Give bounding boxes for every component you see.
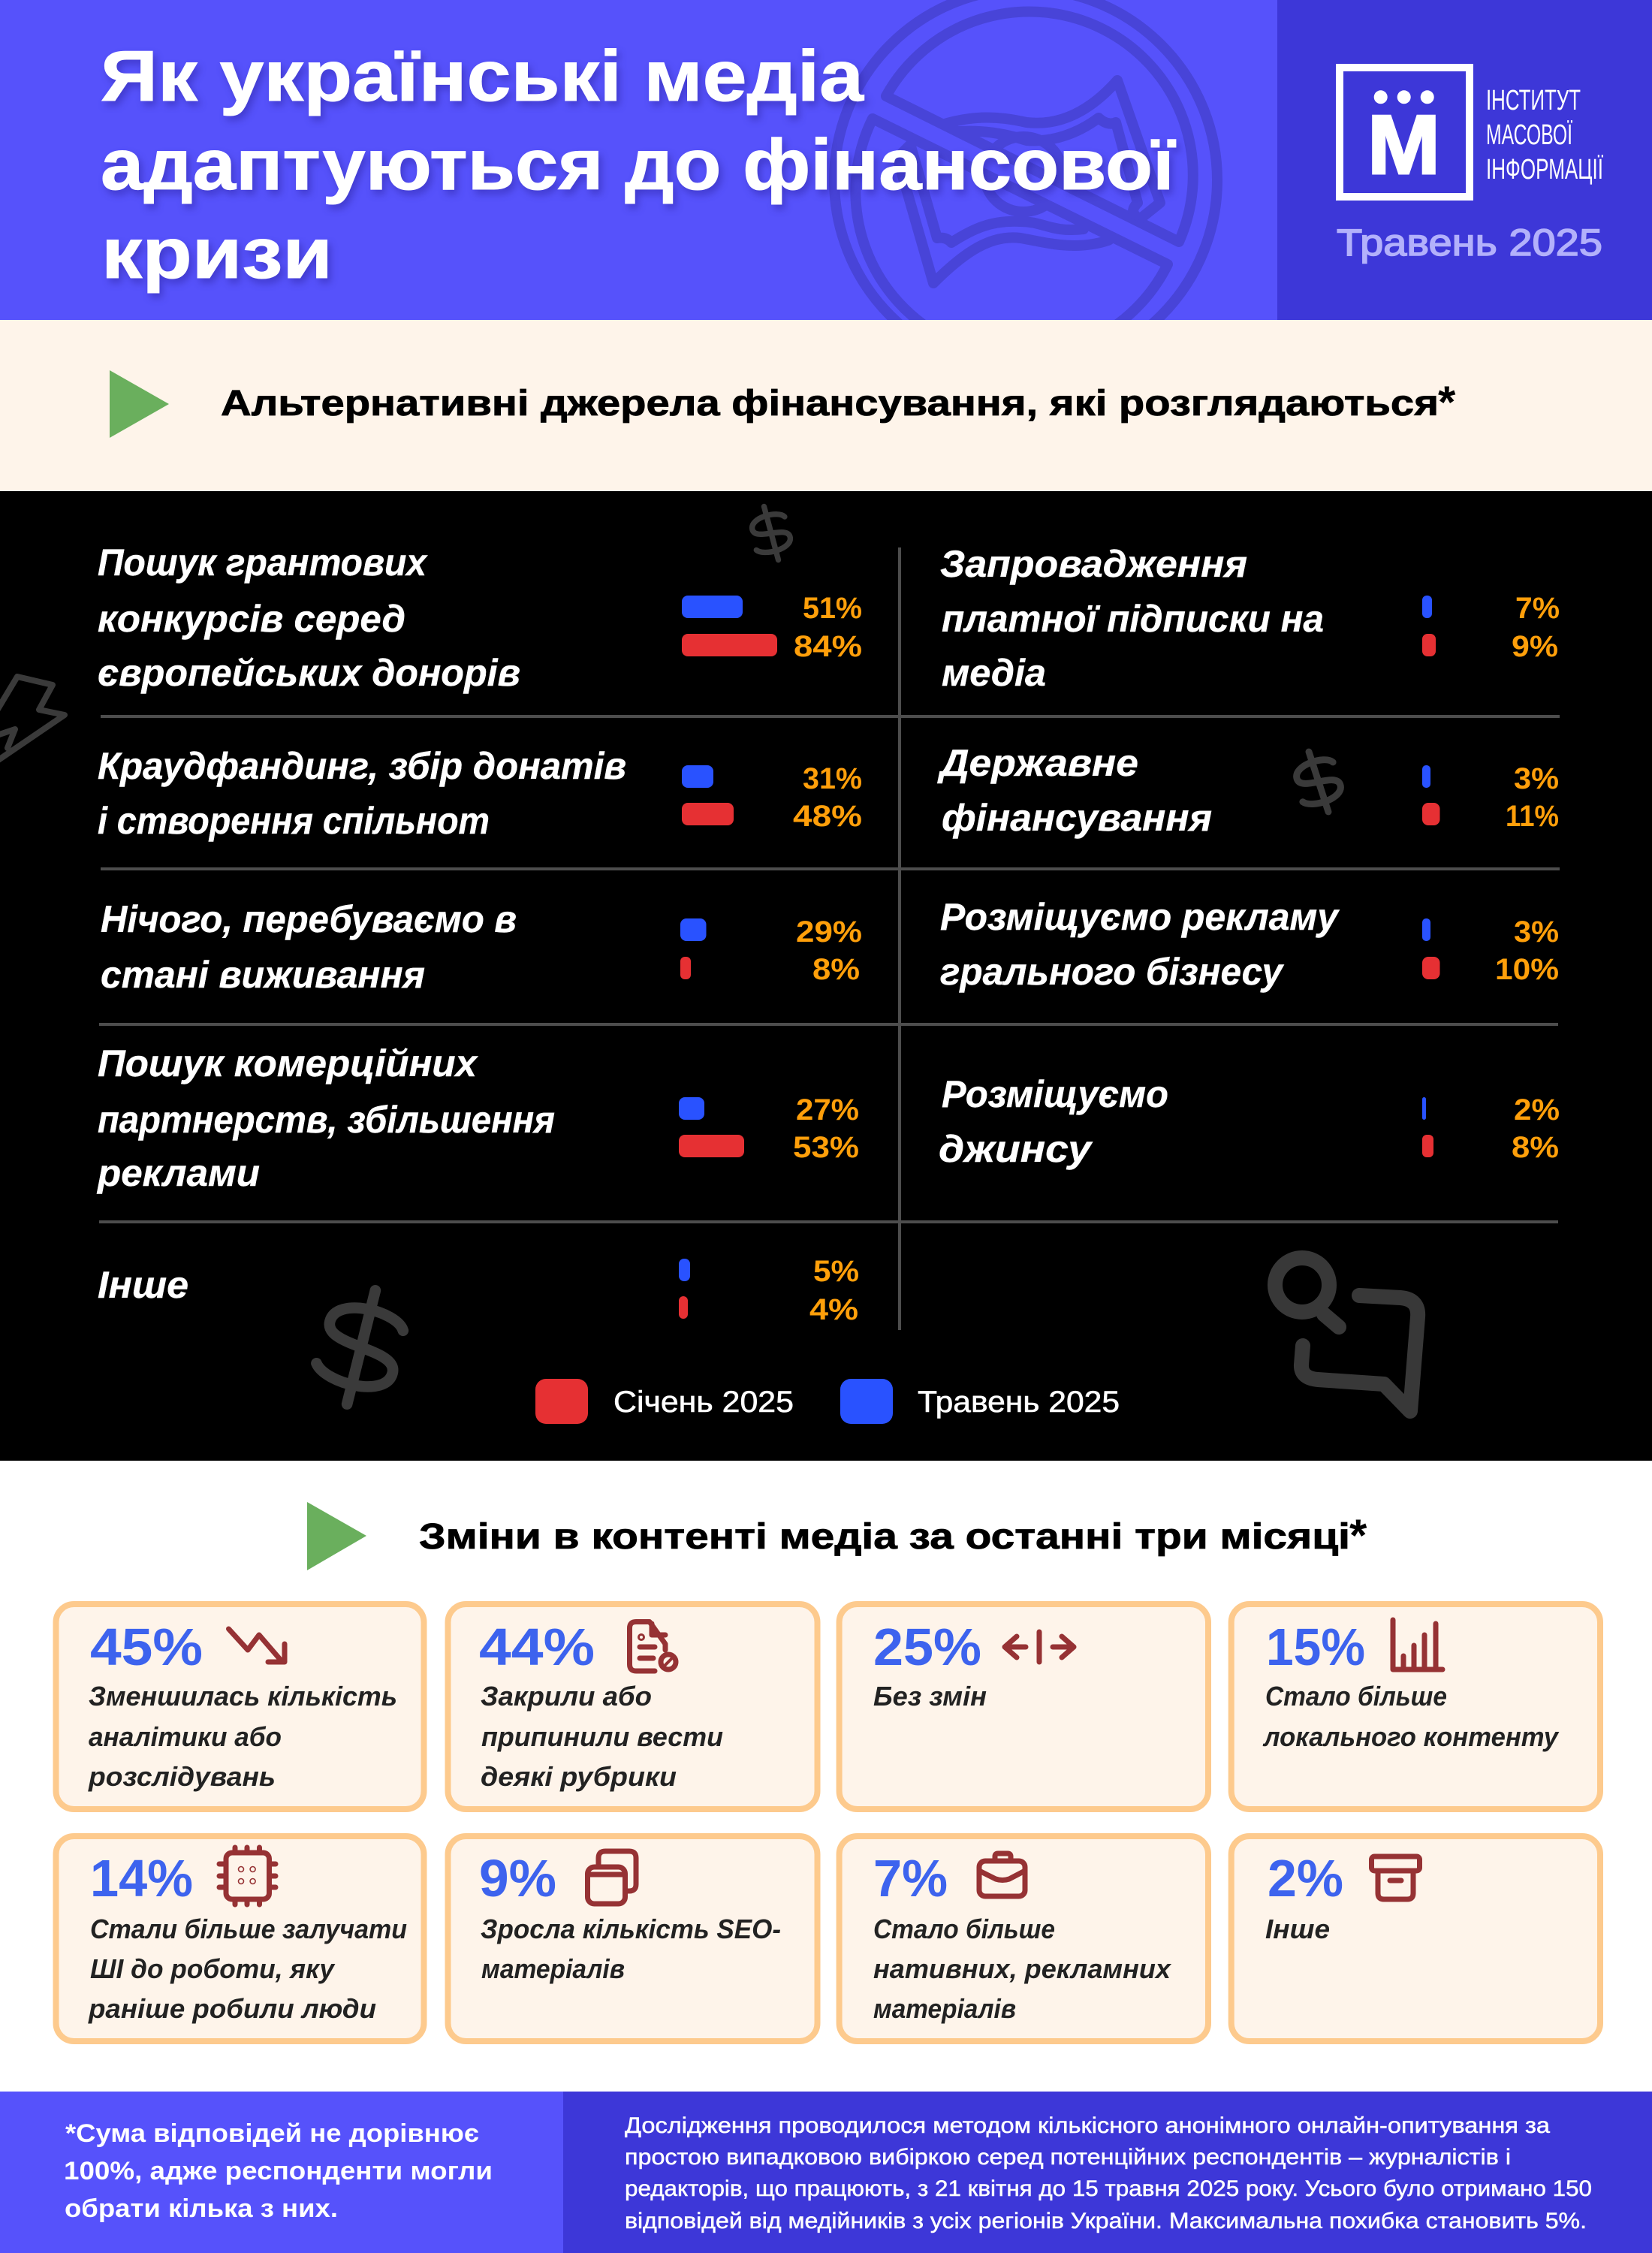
row: paid subscription: медіа (942, 652, 1046, 694)
card: 45% (56, 1604, 424, 1809)
row: paid placements (939, 1073, 1560, 1170)
icon: briefcase (979, 1853, 1025, 1896)
card: 45%: розслідувань (88, 1761, 276, 1792)
section heading: content changes (307, 1502, 1367, 1570)
row: grants: конкурсів серед (98, 598, 405, 640)
icon: chip (219, 1847, 276, 1905)
row: commercial partnerships: 27% (796, 1093, 859, 1126)
decorative icons (0, 502, 1418, 1413)
title: кризи (101, 213, 333, 294)
title: Як українські медіа (101, 36, 864, 116)
card: 9%: матеріалів (481, 1953, 625, 1984)
methodology: простою випадковою вибіркою серед потенційних респондентів – журналістів і (625, 2145, 1511, 2170)
row: grants (98, 541, 862, 694)
card: 14%: 14% (90, 1849, 193, 1908)
watermark: crossed-out banknote (829, 0, 1222, 320)
icon: layers (587, 1851, 636, 1904)
card: 14%: Стали більше залучати (90, 1914, 407, 1944)
card: 44%: 44% (479, 1618, 595, 1676)
row: grants: Пошук грантових (98, 541, 428, 584)
card: 45%: 45% (90, 1618, 203, 1676)
heading: funding sources (221, 377, 1456, 427)
row: other: 4% (809, 1293, 858, 1326)
card: 15% (1231, 1604, 1600, 1809)
row: crowdfunding: Краудфандинг, збір донатів (98, 745, 626, 787)
row: commercial partnerships: Пошук комерційних (98, 1042, 478, 1084)
grid lines (99, 547, 1560, 1330)
card: 44% (448, 1604, 817, 1809)
row: nothing: 8% (812, 953, 860, 986)
card: 45%: Зменшилась кількість (89, 1681, 397, 1712)
row: other: Інше (98, 1264, 188, 1306)
organisation name: ІНФОРМАЦІЇ (1486, 154, 1603, 185)
legend: Травень 2025 (918, 1386, 1120, 1419)
legend: Січень 2025 (613, 1386, 794, 1419)
row: grants: 84% (794, 630, 862, 663)
heading text: Зміни в контенті медіа за останні три місяці (419, 1517, 1350, 1557)
card: 7%: матеріалів (873, 1993, 1016, 2024)
card: 9% (448, 1836, 817, 2041)
organisation name: МАСОВОЇ (1486, 119, 1572, 151)
card: 7% (840, 1836, 1208, 2041)
row: nothing: 29% (796, 915, 862, 949)
row: state funding: 11% (1506, 800, 1559, 833)
card: 7%: нативних, рекламних (873, 1953, 1172, 1984)
icon: arrows apart (1005, 1632, 1074, 1662)
card: 7%: 7% (873, 1849, 948, 1908)
row: paid subscription: 9% (1512, 630, 1558, 663)
row: paid subscription: Запровадження (940, 543, 1247, 585)
logo mark: М (1367, 98, 1440, 192)
row: paid placements: джинсу (939, 1128, 1093, 1170)
heading text (419, 1510, 1367, 1561)
footnote (64, 2119, 493, 2223)
card: 2% (1231, 1836, 1600, 2041)
card: 25%: 25% (873, 1618, 981, 1676)
row: paid subscription: платної підписки на (942, 598, 1324, 640)
row: gambling ads: 10% (1495, 953, 1559, 986)
legend (535, 1379, 1120, 1424)
card: 14%: ШІ до роботи, яку (90, 1953, 336, 1984)
methodology: відповідей від медійників з усіх регіонів України. Максимальна похибка становить 5%. (625, 2209, 1587, 2233)
row: crowdfunding: і створення спільнот (98, 800, 490, 842)
row: nothing (101, 898, 862, 996)
card: 44%: деякі рубрики (481, 1761, 677, 1792)
header background (0, 0, 1277, 320)
row: commercial partnerships: партнерств, збільшення (98, 1099, 555, 1141)
heading text: * (1349, 1510, 1367, 1561)
row: nothing: стані виживання (101, 954, 425, 996)
row: paid placements: Розміщуємо (942, 1073, 1168, 1115)
row: grants: 51% (803, 592, 862, 625)
row: state funding: фінансування (942, 797, 1212, 839)
row: gambling ads (940, 896, 1559, 993)
icon: archive box (1371, 1856, 1419, 1899)
row: other: 5% (813, 1255, 859, 1288)
title (101, 36, 1176, 294)
icon: green triangle (110, 370, 169, 438)
date: Травень 2025 (1337, 222, 1602, 264)
icon: falling arrow (228, 1629, 285, 1662)
panel: funding sources chart (0, 491, 1652, 1461)
footnote: обрати кілька з них. (65, 2194, 338, 2223)
card: 15%: Стало більше (1265, 1681, 1447, 1712)
heading: funding sources: * (1438, 377, 1456, 427)
methodology: редакторів, що працюють, з 21 квітня до 15 травня 2025 року. Усього було отримано 150 (625, 2176, 1592, 2201)
methodology (625, 2113, 1592, 2233)
card: 45%: аналітики або (89, 1721, 282, 1752)
row: commercial partnerships: 53% (793, 1131, 859, 1164)
footnote: *Сума відповідей не дорівнює (65, 2119, 479, 2148)
card: 44%: припинили вести (481, 1721, 723, 1752)
logo panel (1277, 0, 1652, 320)
row: paid subscription: 7% (1515, 592, 1560, 625)
row: state funding: 3% (1514, 762, 1559, 795)
row: crowdfunding (98, 745, 862, 842)
card: 15%: локального контенту (1262, 1721, 1560, 1752)
row: commercial partnerships (96, 1042, 859, 1194)
card: 25% (840, 1604, 1208, 1809)
section heading band: funding (0, 320, 1652, 491)
footnote: 100%, адже респонденти могли (64, 2157, 493, 2185)
logo mark (1340, 68, 1470, 197)
row: crowdfunding: 31% (803, 762, 862, 795)
row: commercial partnerships: реклами (96, 1152, 260, 1194)
row: gambling ads: грального бізнесу (940, 951, 1284, 993)
title: адаптуються до фінансової (101, 125, 1176, 205)
row: state funding: Державне (937, 742, 1138, 784)
icon: document (629, 1622, 676, 1671)
card: 14%: раніше робили люди (88, 1993, 376, 2024)
icon: green triangle (307, 1502, 366, 1570)
row: crowdfunding: 48% (793, 800, 862, 833)
organisation name: ІНСТИТУТ (1486, 85, 1581, 116)
footer (0, 2092, 1652, 2253)
card: 2%: 2% (1268, 1849, 1343, 1908)
row: state funding (937, 742, 1559, 839)
header panel (0, 0, 1652, 320)
row: paid placements: 2% (1514, 1093, 1560, 1126)
card: 7%: Стало більше (873, 1914, 1055, 1944)
row: gambling ads: 3% (1514, 915, 1559, 949)
row: grants: європейських донорів (98, 652, 520, 694)
organisation name (1486, 85, 1603, 185)
card: 25%: Без змін (873, 1681, 987, 1712)
card: 2%: Інше (1265, 1914, 1330, 1944)
row: paid subscription (940, 543, 1560, 694)
icon: bar chart (1393, 1620, 1442, 1669)
row: other (98, 1255, 859, 1326)
card: 15%: 15% (1266, 1618, 1365, 1676)
card: 9%: 9% (479, 1849, 556, 1908)
card: 44%: Закрили або (481, 1681, 652, 1712)
row: paid placements: 8% (1512, 1131, 1559, 1164)
card: 14% (56, 1836, 424, 2041)
heading: funding sources: Альтернативні джерела фінансування, які розглядаються (221, 384, 1439, 424)
methodology: Дослідження проводилося методом кількісного анонімного онлайн-опитування за (625, 2113, 1550, 2138)
row: nothing: Нічого, перебуваємо в (101, 898, 517, 940)
card: 9%: Зросла кількість SEO- (481, 1914, 781, 1944)
row: gambling ads: Розміщуємо рекламу (940, 896, 1340, 938)
